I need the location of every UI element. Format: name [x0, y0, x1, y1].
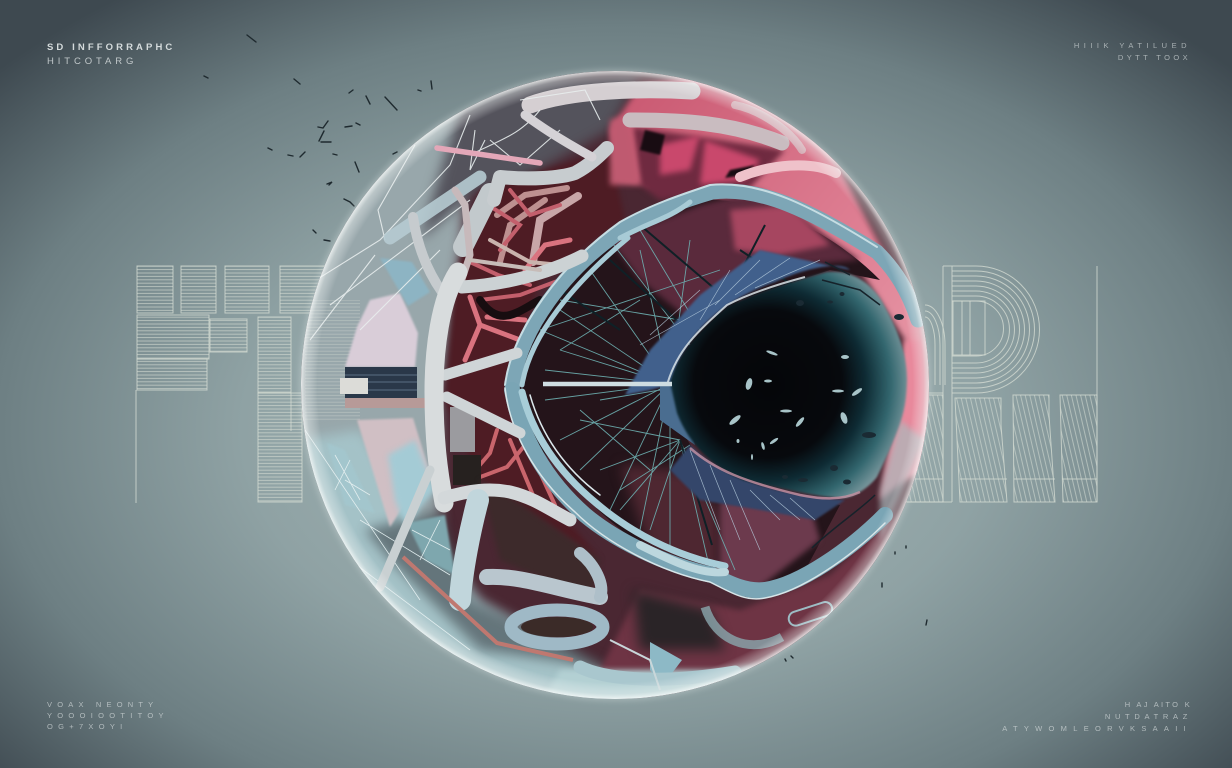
title text top left: SD INFFORRAPHC	[47, 42, 175, 53]
glass rim	[300, 70, 930, 700]
pink rim band	[403, 557, 573, 660]
caption top right: DYTT TOOX	[1118, 53, 1191, 62]
leaf and lower tubes	[580, 600, 834, 690]
title text top left: HITCOTARG	[47, 56, 137, 67]
line-art letters right	[905, 266, 1097, 502]
dark net struts	[560, 225, 800, 545]
caption bottom left: OG+7XOYI	[47, 722, 128, 731]
blue crystal	[380, 258, 430, 306]
caption bottom right	[1002, 700, 1192, 733]
sphere	[295, 60, 935, 720]
caption bottom right: ATYWOMLEORVKSAAII	[1002, 724, 1192, 733]
glass rim facet lines	[300, 90, 600, 340]
teal net lines	[540, 230, 735, 570]
lavender block	[345, 293, 418, 367]
pale top tubes	[530, 90, 836, 177]
white lower block	[357, 418, 428, 527]
blue mesh around eye	[625, 250, 850, 550]
glass left zone	[295, 60, 640, 720]
caption bottom right: NUTDATRAZ	[1105, 712, 1192, 721]
caption bottom right: H AJ AITO K	[1125, 700, 1192, 709]
line-art letters left	[136, 266, 340, 503]
lower right maroon zone	[540, 420, 925, 705]
pale crystals lower left	[305, 430, 470, 650]
fine black filament	[812, 262, 880, 548]
net interior	[510, 190, 880, 595]
title text top left	[47, 42, 175, 67]
lens eye	[667, 272, 907, 498]
dark loop hole	[521, 617, 593, 637]
blue membrane shell	[505, 184, 918, 599]
caption bottom left	[47, 700, 169, 731]
caption top right	[1074, 41, 1191, 62]
sphere halo	[299, 69, 931, 701]
horizontal strut	[543, 382, 672, 386]
dark stripe block	[340, 367, 433, 408]
pink upper right zone	[610, 72, 935, 500]
sphere base colour	[300, 70, 930, 700]
caption bottom left: VOAX NEONTY	[47, 700, 158, 709]
red interior zone	[445, 150, 625, 600]
particles upper left	[204, 35, 432, 241]
caption top right: HIIIK YATILUED	[1074, 41, 1191, 50]
caption bottom left: YOOOIOOTITOY	[47, 711, 169, 720]
white struts	[380, 115, 607, 644]
teal fill of block	[388, 440, 435, 525]
particles lower right	[785, 546, 927, 661]
